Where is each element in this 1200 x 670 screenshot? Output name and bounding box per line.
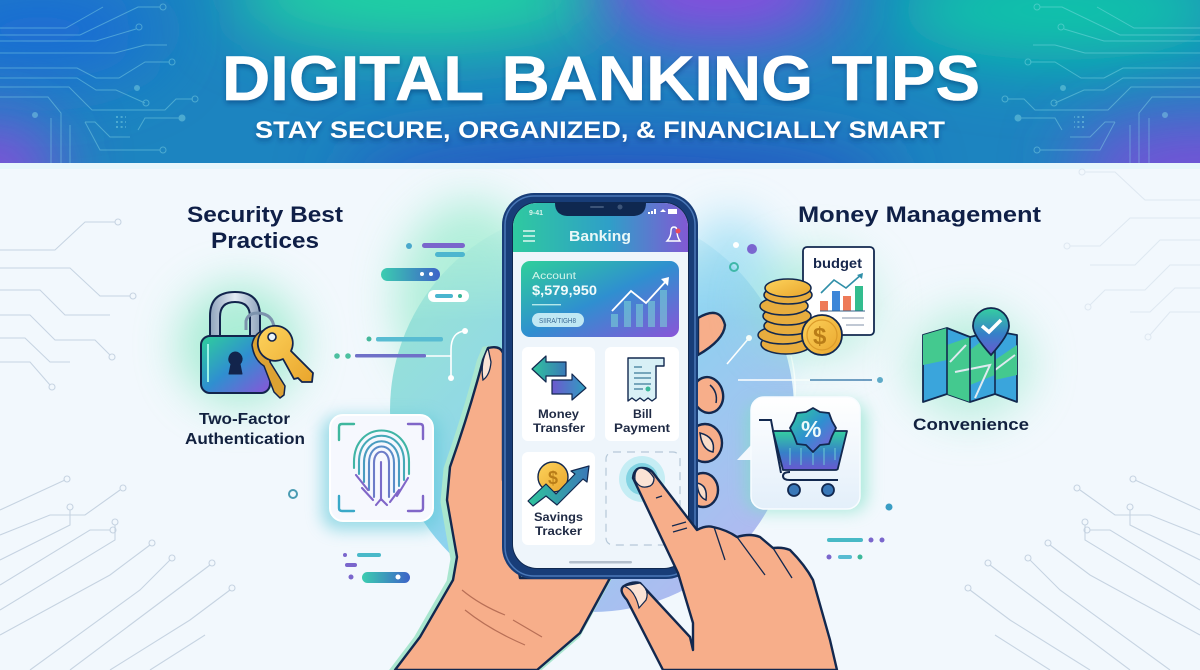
mini growth chart <box>611 277 669 327</box>
tile: bill payment <box>605 347 679 441</box>
background circuit traces right lower <box>965 476 1200 670</box>
header banner <box>0 0 1200 163</box>
tile: money transfer <box>522 347 595 441</box>
left hand <box>392 347 610 670</box>
tile: savings tracker: $ <box>548 468 558 488</box>
tile: dashed tap target <box>606 452 680 545</box>
background circuit traces left lower <box>0 476 235 670</box>
tile: savings tracker <box>522 452 595 545</box>
tile: bill payment: Payment <box>614 423 670 435</box>
phone notch <box>555 203 646 216</box>
icon: map and location pin <box>908 308 1032 420</box>
label: two-factor authentication: Two-Factor <box>199 411 290 428</box>
home indicator <box>569 561 632 564</box>
fingerprint card <box>322 415 440 530</box>
label: two-factor authentication <box>185 411 305 448</box>
tile: bill payment: Bill <box>633 409 652 421</box>
header circuit lines right <box>1002 4 1200 163</box>
heading: money management: Money Management <box>798 202 1042 227</box>
tile: money transfer: Transfer <box>533 423 586 435</box>
app header bar <box>513 203 688 252</box>
heading: security best practices: Security Best <box>187 202 344 227</box>
label: convenience: Convenience <box>913 415 1029 434</box>
subtitle: STAY SECURE, ORGANIZED, & FINANCIALLY SMART <box>255 117 945 144</box>
decorative data bars upper left <box>289 243 469 583</box>
account card: SIIRA/TIGH8 <box>539 316 576 325</box>
title: DIGITAL BANKING TIPS <box>222 44 980 114</box>
icon: budget document and coins <box>753 247 877 360</box>
status bar: 9-41 <box>529 210 543 217</box>
icon: fingerprint ridges <box>354 430 409 505</box>
bell icon <box>667 227 680 241</box>
background circuit traces left upper <box>0 219 136 390</box>
right hand tapping <box>622 468 837 670</box>
app title: Banking <box>569 228 631 245</box>
large dollar coin: $ <box>813 323 827 350</box>
header circuit lines left <box>0 4 198 163</box>
coin stack <box>758 279 812 354</box>
fingers behind phone on right <box>688 313 726 507</box>
label: two-factor authentication: Authentication <box>185 431 305 448</box>
icon: cart: % <box>801 416 821 442</box>
heading: security best practices: Practices <box>211 228 319 253</box>
icon: padlock and keys <box>201 292 313 398</box>
shopping cart speech bubble <box>737 397 867 512</box>
decorative dots and connectors right <box>727 242 892 560</box>
phone <box>502 193 698 579</box>
background circuit traces right upper <box>1064 169 1200 340</box>
tile: money transfer: Money <box>538 409 580 421</box>
central glow behind phone <box>178 200 794 612</box>
menu icon <box>523 231 535 241</box>
tile: savings tracker: Tracker <box>535 526 583 538</box>
account card <box>521 261 679 337</box>
icon: back key <box>252 330 285 398</box>
heading: security best practices <box>187 202 344 253</box>
icon: front key <box>258 326 313 382</box>
budget sheet: budget <box>813 255 862 271</box>
tile: savings tracker: Savings <box>534 512 583 524</box>
account card: $,579,950 <box>532 282 597 298</box>
account card: Account <box>532 270 576 282</box>
